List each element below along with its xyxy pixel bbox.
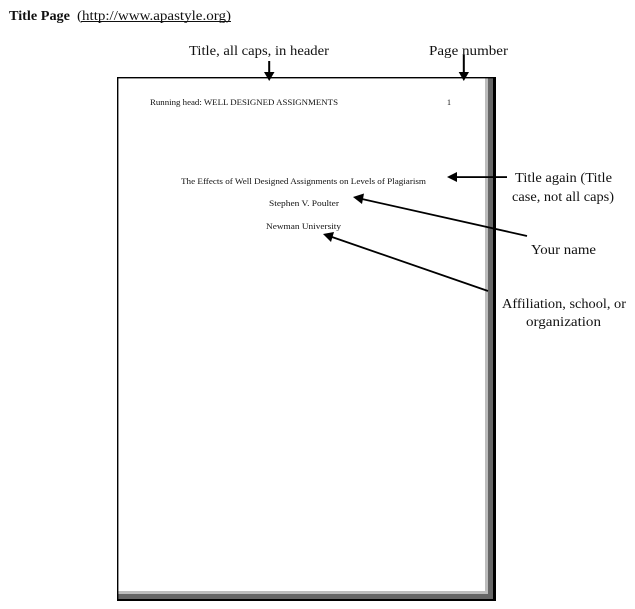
label: title again: Title again (Title (515, 170, 612, 185)
label: your name: Your name (531, 242, 596, 257)
running head: Running head: WELL DESIGNED ASSIGNMENTS (150, 98, 338, 107)
affiliation: Newman University (266, 222, 342, 231)
paper title: The Effects of Well Designed Assignments on Levels of Plagiarism (181, 177, 427, 186)
heading: (http://www.apastyle.org) (77, 8, 231, 23)
arrow: affiliation (323, 232, 488, 291)
arrow: your name (353, 194, 527, 236)
heading: Title Page (9, 8, 70, 23)
heading (9, 8, 231, 23)
label: affiliation (502, 296, 627, 329)
panel: sample title page (117, 77, 496, 601)
label: title in header: Title, all caps, in header (189, 43, 330, 58)
arrow: page number (459, 55, 469, 81)
arrow: title again (447, 172, 507, 182)
author name: Stephen V. Poulter (269, 199, 339, 208)
arrow: title in header (264, 61, 274, 81)
page number: 1 (447, 98, 451, 107)
label: affiliation: Affiliation, school, or (502, 296, 627, 311)
label: page number: Page number (429, 43, 509, 58)
label: title again (512, 170, 614, 204)
label: title again: case, not all caps) (512, 189, 614, 204)
label: affiliation: organization (526, 314, 601, 329)
